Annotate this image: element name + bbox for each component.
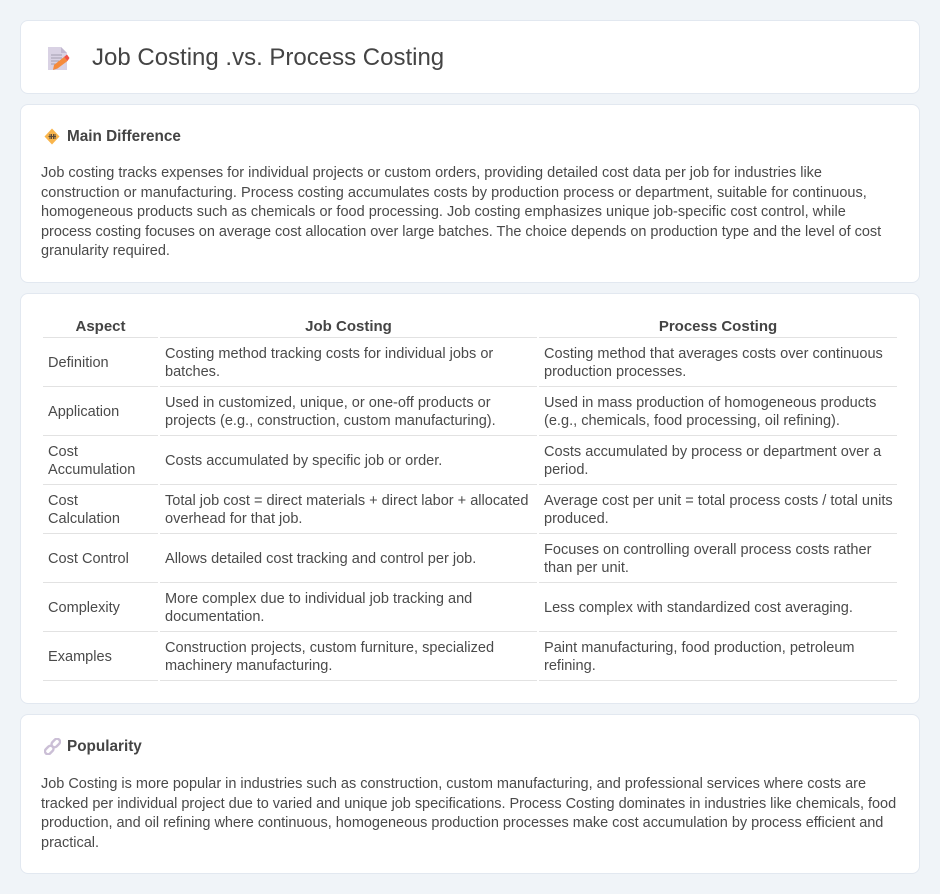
text: main difference: homogeneous products such as chemicals or food processing. Job costing emphasizes unique job-specific cost control, while <box>41 204 846 220</box>
comparison table: Average cost per unit = total process costs / total units <box>544 493 893 509</box>
comparison table: Examples <box>48 649 112 665</box>
comparison table: Cost Control <box>48 551 129 567</box>
text: popularity: production, and oil refining where continuous, homogeneous production processes make cost accumulation by process efficient and <box>41 815 883 831</box>
comparison table: Costing method tracking costs for individual jobs or <box>165 346 493 362</box>
comparison table: More complex due to individual job tracking and <box>165 591 472 607</box>
text: popularity: tracked per individual project due to varied and unique job specifications. Process Costing dominates in industries like chemicals, food <box>41 796 896 812</box>
comparison table: Used in mass production of homogeneous products <box>544 395 876 411</box>
comparison table: Job Costing <box>305 318 392 334</box>
text: main difference: Job costing tracks expenses for individual projects or custom orders, providing detailed cost data per job for industries like <box>41 165 822 181</box>
text: popularity: Job Costing is more popular in industries such as construction, custom manufacturing, and professional services where costs are <box>41 776 866 792</box>
comparison table: Cost <box>48 493 78 509</box>
title: Job Costing .vs. Process Costing <box>92 44 444 71</box>
comparison table: Calculation <box>48 511 120 527</box>
icon: chain link <box>44 738 61 755</box>
comparison table: Process Costing <box>659 318 777 334</box>
comparison table: machinery manufacturing. <box>165 658 332 674</box>
comparison table: Aspect <box>75 318 126 334</box>
comparison table <box>43 318 897 681</box>
comparison table: documentation. <box>165 609 264 625</box>
comparison table: Costing method that averages costs over continuous <box>544 346 883 362</box>
comparison table: Accumulation <box>48 462 135 478</box>
comparison table: Complexity <box>48 600 120 616</box>
comparison table: (e.g., chemicals, food processing, oil refining). <box>544 413 840 429</box>
comparison table: Cost <box>48 444 78 460</box>
comparison table: Focuses on controlling overall process costs rather <box>544 542 871 558</box>
text: main difference: process costing focuses on average cost allocation over large batches. The choice depends on production type and the level of cost <box>41 224 881 240</box>
comparison table: Less complex with standardized cost averaging. <box>544 600 853 616</box>
icon: diamond sign <box>44 128 60 144</box>
comparison table: Costs accumulated by specific job or order. <box>165 453 442 469</box>
text: main difference: construction or manufacturing. Process costing accumulates costs by production process or department, suitable for continuous, <box>41 185 867 201</box>
panel: main difference <box>20 104 920 283</box>
comparison table: production processes. <box>544 364 686 380</box>
comparison table: Definition <box>48 355 109 371</box>
comparison table: refining. <box>544 658 596 674</box>
comparison table: Total job cost = direct materials + direct labor + allocated <box>165 493 528 509</box>
comparison table: Allows detailed cost tracking and control per job. <box>165 551 476 567</box>
comparison table: produced. <box>544 511 609 527</box>
comparison table: overhead for that job. <box>165 511 302 527</box>
text: main difference <box>41 165 882 259</box>
comparison table: Construction projects, custom furniture, specialized <box>165 640 494 656</box>
icon: document with pencil <box>48 47 70 70</box>
comparison table: Used in customized, unique, or one-off products or <box>165 395 491 411</box>
header card <box>20 20 920 94</box>
comparison table: than per unit. <box>544 560 629 576</box>
comparison table: Paint manufacturing, food production, petroleum <box>544 640 855 656</box>
comparison table: period. <box>544 462 588 478</box>
comparison table: Costs accumulated by process or department over a <box>544 444 881 460</box>
comparison table: Application <box>48 404 119 420</box>
text: main difference: granularity required. <box>41 243 170 259</box>
text: popularity <box>41 776 896 851</box>
heading: popularity: Popularity <box>67 738 142 755</box>
comparison table: projects (e.g., construction, custom manufacturing). <box>165 413 496 429</box>
panel: popularity <box>20 714 920 874</box>
heading: main difference: Main Difference <box>67 128 181 145</box>
text: popularity: practical. <box>41 835 99 851</box>
panel: comparison table <box>20 293 920 704</box>
comparison table: batches. <box>165 364 220 380</box>
